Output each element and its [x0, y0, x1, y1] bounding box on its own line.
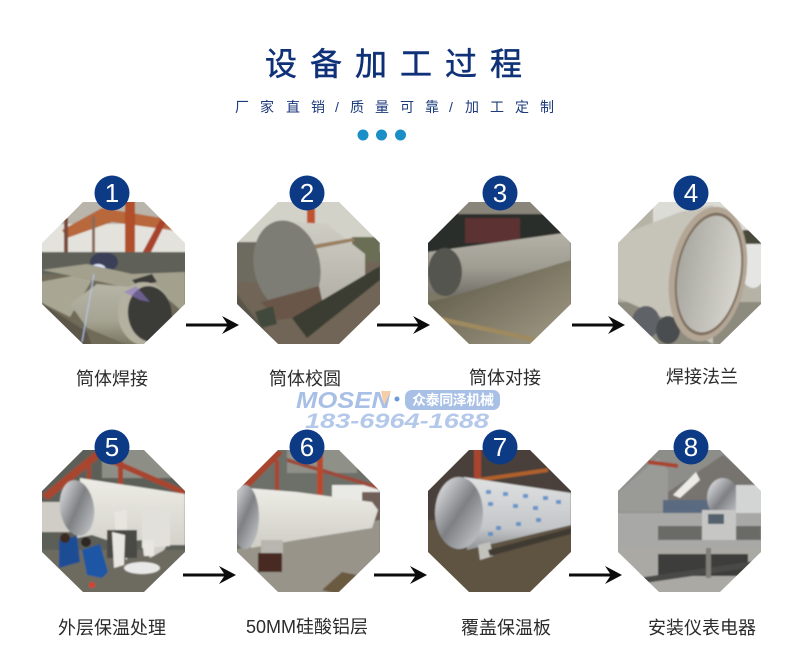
watermark: brand and phone [296, 387, 500, 433]
step number 6 [290, 430, 324, 464]
photo 4: welding the flange [616, 200, 767, 348]
photo 5: outer insulation [40, 448, 187, 596]
decorative dots [358, 130, 406, 140]
label step 2: 筒体校圆 [269, 369, 341, 389]
arrow 2 to 3 [377, 316, 430, 334]
photo 3: butt-joining the shell [426, 200, 573, 346]
label step 1: 筒体焊接 [76, 369, 148, 389]
arrow 1 to 2 [186, 316, 239, 334]
step number 2: 2 [300, 178, 314, 208]
label step 6: 50MM硅酸铝层 [246, 617, 368, 637]
step number 1 [94, 176, 130, 210]
step number 4: 4 [684, 178, 698, 208]
step number 5: 5 [105, 432, 119, 462]
subtitle: 厂家直销/质量可靠/加工定制 [235, 99, 554, 115]
arrow 7 to 8 [569, 566, 622, 584]
label step 8: 安装仪表电器 [648, 618, 756, 638]
label step 5: 外层保温处理 [58, 618, 166, 638]
label step 4: 焊接法兰 [666, 367, 738, 387]
photo 1: welding the shell [40, 200, 187, 349]
step number 2 [290, 176, 324, 210]
watermark: brand and phone: 183-6964-1688 [305, 410, 489, 433]
step number 7: 7 [493, 432, 507, 462]
step number 7 [482, 430, 518, 464]
arrow 3 to 4 [572, 316, 625, 334]
step number 3: 3 [493, 178, 507, 208]
photo 8: installing instruments and electrics [616, 448, 763, 594]
arrow 5 to 6 [183, 566, 236, 584]
watermark: brand and phone: 众泰同泽机械 [412, 392, 494, 408]
step number 8 [674, 430, 708, 464]
step number 8: 8 [684, 432, 698, 462]
step number 3 [482, 176, 518, 210]
step number 5 [94, 430, 130, 464]
step number 1: 1 [105, 178, 119, 208]
photo 2: rounding the shell [235, 200, 382, 346]
label step 7: 覆盖保温板 [461, 618, 551, 638]
arrow 6 to 7 [374, 566, 427, 584]
label step 3: 筒体对接 [469, 368, 541, 388]
step number 4 [674, 176, 708, 210]
watermark: brand and phone: MOSEN [296, 387, 390, 413]
photo 7: covering with insulation panels [426, 448, 573, 594]
photo 6: 50mm aluminium silicate layer [231, 448, 382, 594]
step number 6: 6 [300, 432, 314, 462]
title: 设备加工过程 [265, 46, 535, 82]
